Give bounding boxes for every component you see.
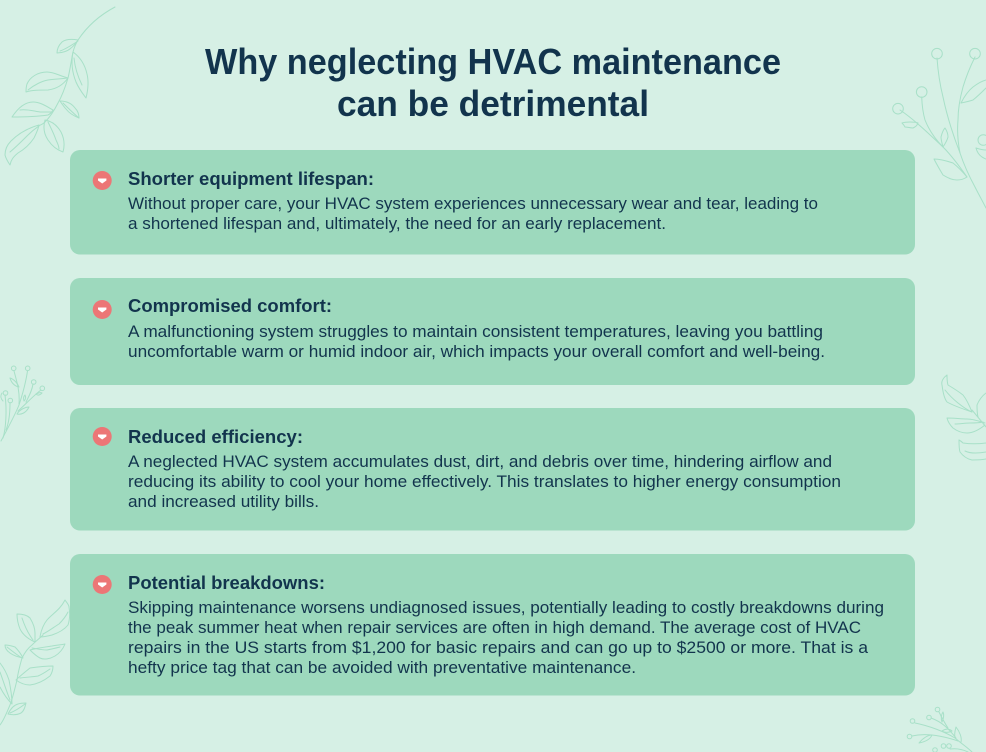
text block: compromised comfort: A malfunctioning system struggles to maintain consistent temperatures, leaving you battling xyxy=(128,323,823,341)
heading: reduced efficiency: Reduced efficiency: xyxy=(128,427,303,447)
heading: compromised comfort: Compromised comfort: xyxy=(128,296,332,316)
decoration: flower stems bottom right xyxy=(907,707,972,752)
panel: compromised comfort xyxy=(70,278,915,385)
icon: red circle with down arrow xyxy=(93,171,112,190)
title: Why neglecting HVAC maintenance xyxy=(205,41,781,82)
icon: red circle with down arrow xyxy=(93,300,112,319)
text block: compromised comfort xyxy=(128,323,825,361)
icon: red circle with down arrow xyxy=(93,427,112,446)
text block: reduced efficiency: and increased utility bills. xyxy=(128,493,319,511)
panel: potential breakdowns xyxy=(70,554,915,696)
title xyxy=(205,41,781,124)
title: can be detrimental xyxy=(337,83,649,124)
panel: shorter equipment lifespan xyxy=(70,150,915,254)
decoration: leafy branch top left xyxy=(5,7,115,165)
text block: reduced efficiency: A neglected HVAC system accumulates dust, dirt, and debris over time, hindering airflow and xyxy=(128,453,832,471)
decoration: leafy branch bottom left xyxy=(0,600,70,725)
decoration: flower stems middle left xyxy=(1,366,45,441)
text block: reduced efficiency: reducing its ability to cool your home effectively. This translates to higher energy consumption xyxy=(128,473,841,491)
text block: potential breakdowns: the peak summer heat when repair services are often in high demand. The average cost of HVAC xyxy=(128,619,861,637)
text block: potential breakdowns: Skipping maintenance worsens undiagnosed issues, potentially leading to costly breakdowns during xyxy=(128,599,884,617)
text block: compromised comfort: uncomfortable warm or humid indoor air, which impacts your overall comfort and well-being. xyxy=(128,343,825,361)
text block: potential breakdowns xyxy=(128,599,884,677)
text block: shorter equipment lifespan: a shortened lifespan and, ultimately, the need for an early replacement. xyxy=(128,215,666,233)
text block: potential breakdowns: repairs in the US starts from $1,200 for basic repairs and can go up to $2500 or more. That is a xyxy=(128,639,869,657)
text block: reduced efficiency xyxy=(128,453,841,511)
decoration: flower stems top right xyxy=(893,48,986,208)
text block: shorter equipment lifespan xyxy=(128,195,818,233)
heading: shorter equipment lifespan: Shorter equipment lifespan: xyxy=(128,169,374,189)
text block: shorter equipment lifespan: Without proper care, your HVAC system experiences unnecessary wear and tear, leading to xyxy=(128,195,818,213)
decoration: leaves middle right xyxy=(942,375,986,460)
text block: potential breakdowns: hefty price tag that can be avoided with preventative maintenance. xyxy=(128,659,636,677)
panel: reduced efficiency xyxy=(70,408,915,530)
icon: red circle with down arrow xyxy=(93,575,112,594)
heading: potential breakdowns: Potential breakdowns: xyxy=(128,573,325,593)
